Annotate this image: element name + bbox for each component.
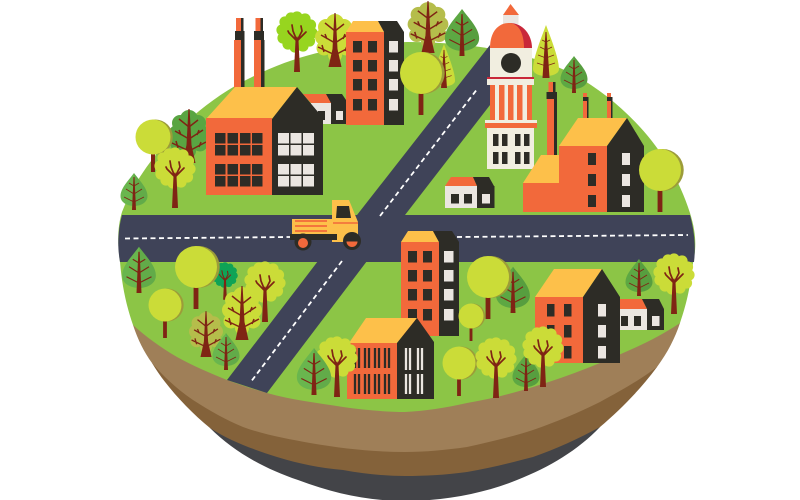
- tree: round far right: [639, 149, 684, 212]
- tree: round small: [148, 288, 184, 338]
- tree: round: [442, 346, 478, 396]
- factory dark windows: [215, 133, 262, 186]
- tree: round yellow-green: [136, 120, 173, 172]
- tree: round large: [467, 256, 512, 319]
- building: factory right: [523, 118, 644, 212]
- tree: bushy olive: [408, 1, 448, 53]
- tree: leaf dark green: [445, 9, 479, 56]
- tree: fluffy over building: [522, 326, 564, 387]
- road: horizontal: [118, 215, 695, 262]
- tree: large leaf: [122, 247, 156, 293]
- tree: bushy lime: [315, 13, 355, 67]
- tree: bushy olive: [189, 311, 223, 357]
- tree: small leaf: [512, 354, 540, 391]
- building: main factory: [206, 87, 323, 195]
- building: tall block centre: [401, 231, 459, 336]
- tree: leaf: [560, 56, 588, 93]
- truck: [290, 200, 361, 250]
- building: striped block bottom: [347, 318, 434, 399]
- factory two chimneys: [546, 82, 612, 156]
- building: clock tower: [485, 4, 537, 169]
- tree group: centre right: [458, 256, 530, 341]
- ground: green disc: [118, 42, 695, 412]
- tree: fluffy lime: [316, 336, 358, 397]
- tree group: top left: [120, 109, 209, 210]
- tree: bushy lime: [222, 286, 262, 340]
- earth layer: light brown soil: [133, 323, 680, 452]
- tree: round near tall block: [400, 52, 445, 115]
- truck cargo: [292, 219, 332, 235]
- factory light windows: [278, 133, 314, 186]
- tree: fluffy teal: [212, 262, 238, 300]
- tree: fluffy lime: [244, 261, 286, 322]
- truck cab: [332, 200, 358, 242]
- building: tall block top: [346, 21, 404, 125]
- small house behind factory: [303, 94, 346, 124]
- roads: [118, 45, 695, 393]
- tree: fluffy lime: [154, 147, 196, 208]
- tree: cone small: [433, 44, 455, 88]
- chimneys: main factory: [234, 18, 264, 88]
- road: diagonal lower: [227, 261, 367, 393]
- stripe windows dark: [355, 348, 389, 394]
- truck wheels: [294, 232, 361, 250]
- tree: small leaf: [212, 333, 240, 370]
- tree: leaf: [297, 348, 331, 395]
- truck chassis: [290, 234, 337, 240]
- stripe windows light: [406, 348, 422, 394]
- tree: fluffy bright green: [276, 11, 318, 72]
- tree group: top right: [533, 25, 588, 93]
- tree: cone: [533, 25, 559, 78]
- house: middle: [445, 177, 494, 208]
- chimney left: [234, 18, 244, 88]
- road: diagonal upper: [357, 45, 490, 215]
- tree: large leaf: [496, 267, 530, 313]
- tree: green bushy behind factory: [169, 109, 209, 163]
- tree: fluffy far right: [653, 253, 695, 314]
- tree group: bottom centre: [297, 336, 358, 397]
- house: right: [620, 299, 664, 330]
- tree group: top centre: [276, 1, 479, 88]
- tree: round small: [458, 304, 485, 341]
- tree group: bottom right: [442, 253, 695, 398]
- tree: round large: [175, 246, 220, 309]
- tree: leaf far right: [626, 259, 652, 296]
- tree: fluffy: [475, 337, 517, 398]
- earth layer: dark base: [210, 427, 600, 500]
- earth layer: dark brown soil: [152, 363, 657, 476]
- chimney right: [254, 18, 264, 88]
- road markings: [125, 88, 688, 383]
- building: right block: [535, 269, 620, 363]
- tree: small leaf: [120, 173, 148, 210]
- tree group: lower left: [122, 246, 286, 370]
